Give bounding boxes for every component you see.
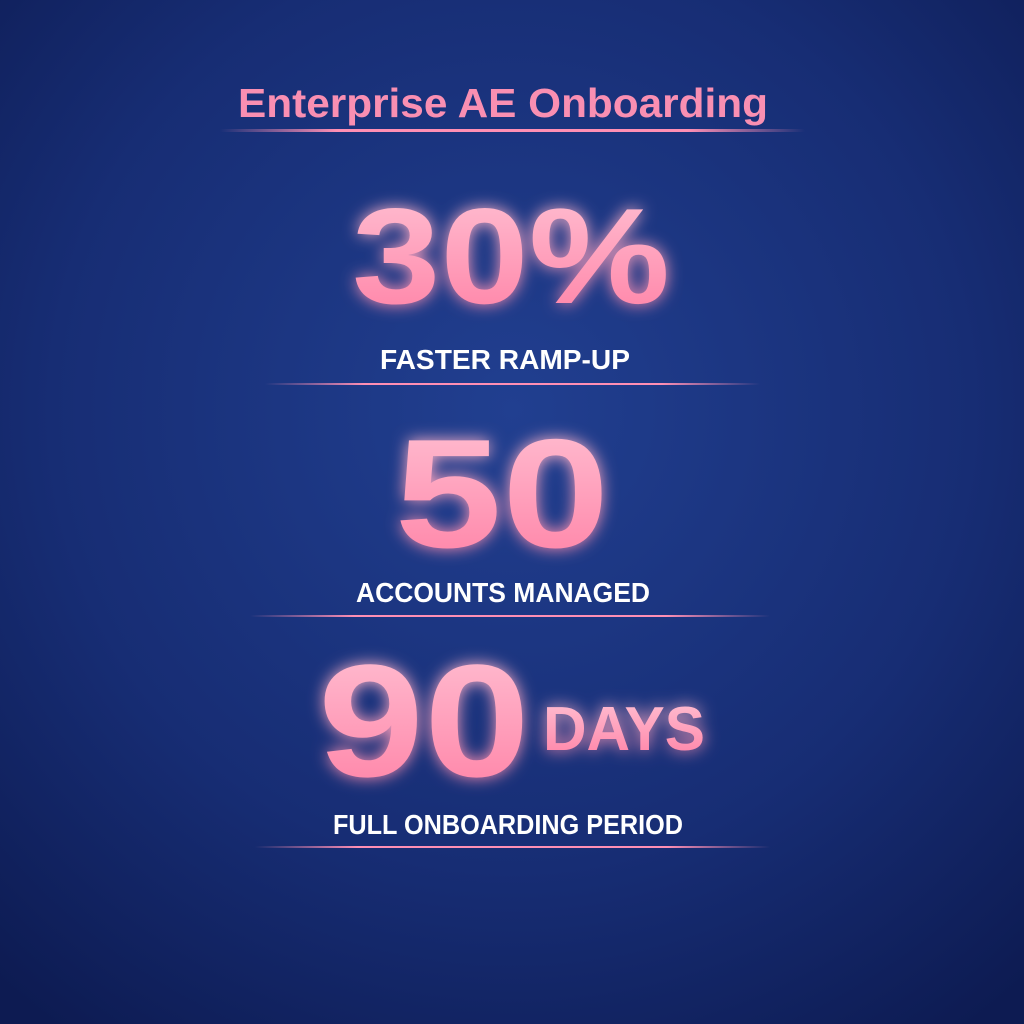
title: Enterprise AE Onboarding xyxy=(238,80,768,126)
stat: 50 accounts managed: ACCOUNTS MANAGED xyxy=(356,577,650,608)
stat: 30% faster ramp-up xyxy=(265,180,760,385)
stat: 90 days full onboarding period xyxy=(255,631,770,848)
stat: 90 days full onboarding period: DAYS xyxy=(543,695,705,764)
stat: 90 days full onboarding period: FULL ONBOARDING PERIOD xyxy=(333,809,683,840)
stat: 50 accounts managed: 50 xyxy=(394,407,610,580)
stat: 30% faster ramp-up: FASTER RAMP-UP xyxy=(380,344,630,375)
stat: 30% faster ramp-up: 30% xyxy=(352,180,670,332)
stat: 90 days full onboarding period: 90 xyxy=(318,631,530,810)
stat: 50 accounts managed xyxy=(250,407,770,617)
